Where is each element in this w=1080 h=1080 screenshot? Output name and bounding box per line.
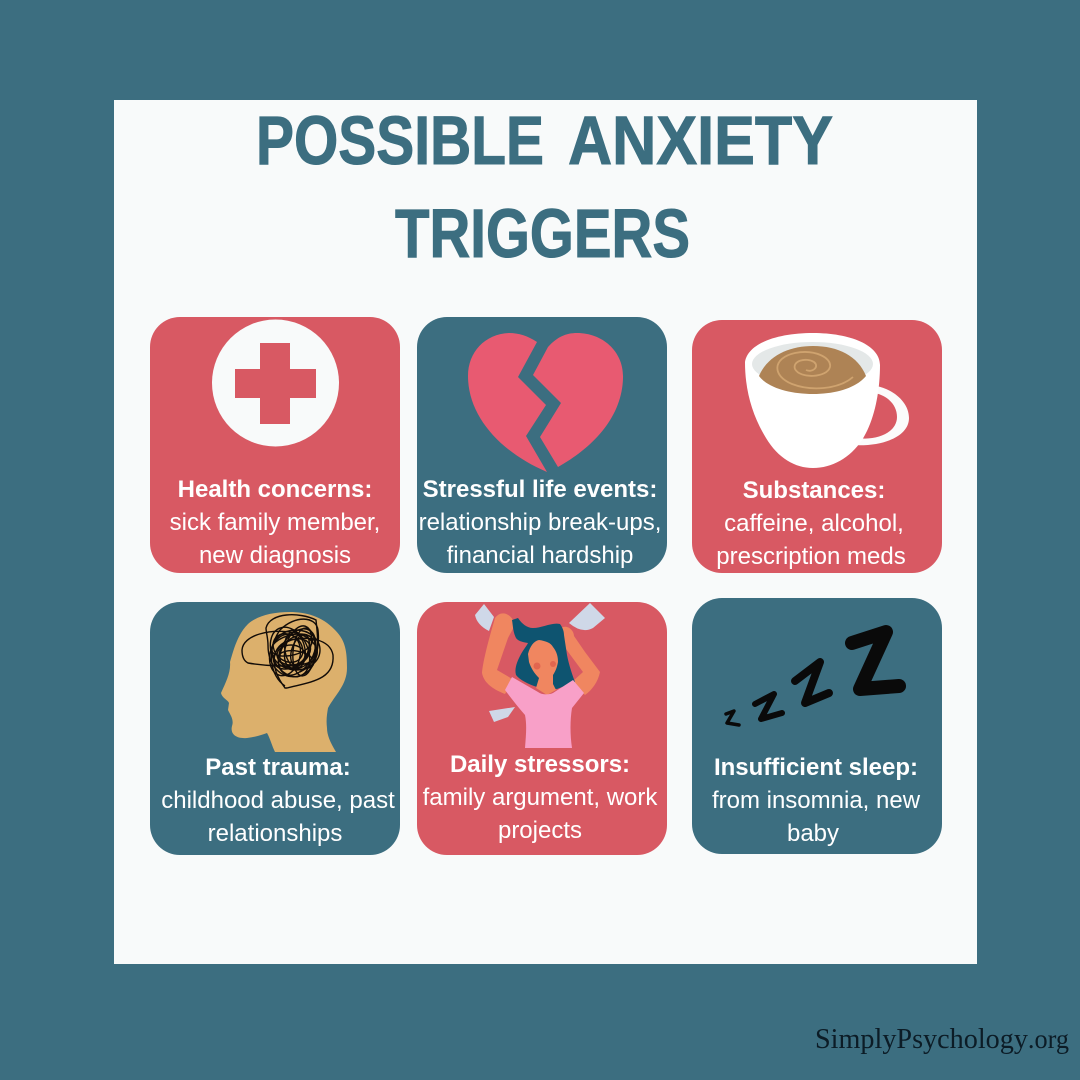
icon: medical cross bbox=[212, 320, 339, 446]
face and neck bbox=[528, 640, 558, 695]
footer: source credit: SimplyPsychology.org bbox=[815, 1023, 1069, 1055]
title: ANXIETY bbox=[568, 102, 833, 179]
text: substances: prescription meds bbox=[716, 543, 906, 570]
text: past trauma: relationships bbox=[208, 820, 342, 847]
text: insufficient sleep bbox=[712, 754, 921, 847]
panel: daily stressors bbox=[417, 602, 667, 855]
text: past trauma bbox=[161, 754, 395, 847]
text: daily stressors: projects bbox=[498, 817, 582, 844]
text: health concerns: new diagnosis bbox=[199, 542, 351, 569]
text: stressful life events: financial hardship bbox=[447, 542, 633, 569]
panel: stressful life events bbox=[417, 317, 667, 573]
text: health concerns: sick family member, bbox=[170, 509, 380, 536]
arms bbox=[482, 613, 514, 694]
cheeks bbox=[534, 661, 556, 670]
text: substances bbox=[716, 477, 906, 570]
title: TRIGGERS bbox=[395, 195, 690, 272]
text: daily stressors: Daily stressors: bbox=[450, 751, 630, 778]
scribble bbox=[242, 615, 333, 688]
shirt bbox=[505, 677, 584, 748]
hair bbox=[512, 618, 575, 689]
flying papers bbox=[475, 603, 605, 722]
text: stressful life events bbox=[419, 476, 661, 569]
text: substances: caffeine, alcohol, bbox=[724, 510, 904, 537]
text: substances: Substances: bbox=[743, 477, 885, 504]
icon: sleeping Z letters bbox=[726, 632, 899, 725]
title: POSSIBLE bbox=[256, 102, 544, 179]
text: daily stressors: family argument, work bbox=[423, 784, 658, 811]
text: insufficient sleep: baby bbox=[787, 820, 839, 847]
icon: broken heart bbox=[468, 333, 623, 472]
text: daily stressors bbox=[423, 751, 658, 844]
panel: health concerns bbox=[150, 317, 400, 573]
text: past trauma: Past trauma: bbox=[205, 754, 351, 781]
text: past trauma: childhood abuse, past bbox=[161, 787, 395, 814]
panel: substances bbox=[692, 320, 942, 573]
text: stressful life events: relationship break-ups, bbox=[419, 509, 661, 536]
text: insufficient sleep: from insomnia, new bbox=[712, 787, 921, 814]
icon: coffee cup bbox=[745, 333, 909, 468]
panel: insufficient sleep bbox=[692, 598, 942, 854]
text: insufficient sleep: Insufficient sleep: bbox=[714, 754, 918, 781]
text: health concerns bbox=[170, 476, 380, 569]
panel: past trauma bbox=[150, 602, 400, 855]
icon: stressed woman bbox=[475, 603, 605, 748]
icon: head with scribble bbox=[221, 612, 347, 752]
title bbox=[256, 102, 833, 272]
panel: white content area bbox=[114, 100, 977, 964]
text: stressful life events: Stressful life events: bbox=[423, 476, 657, 503]
text: health concerns: Health concerns: bbox=[178, 476, 372, 503]
